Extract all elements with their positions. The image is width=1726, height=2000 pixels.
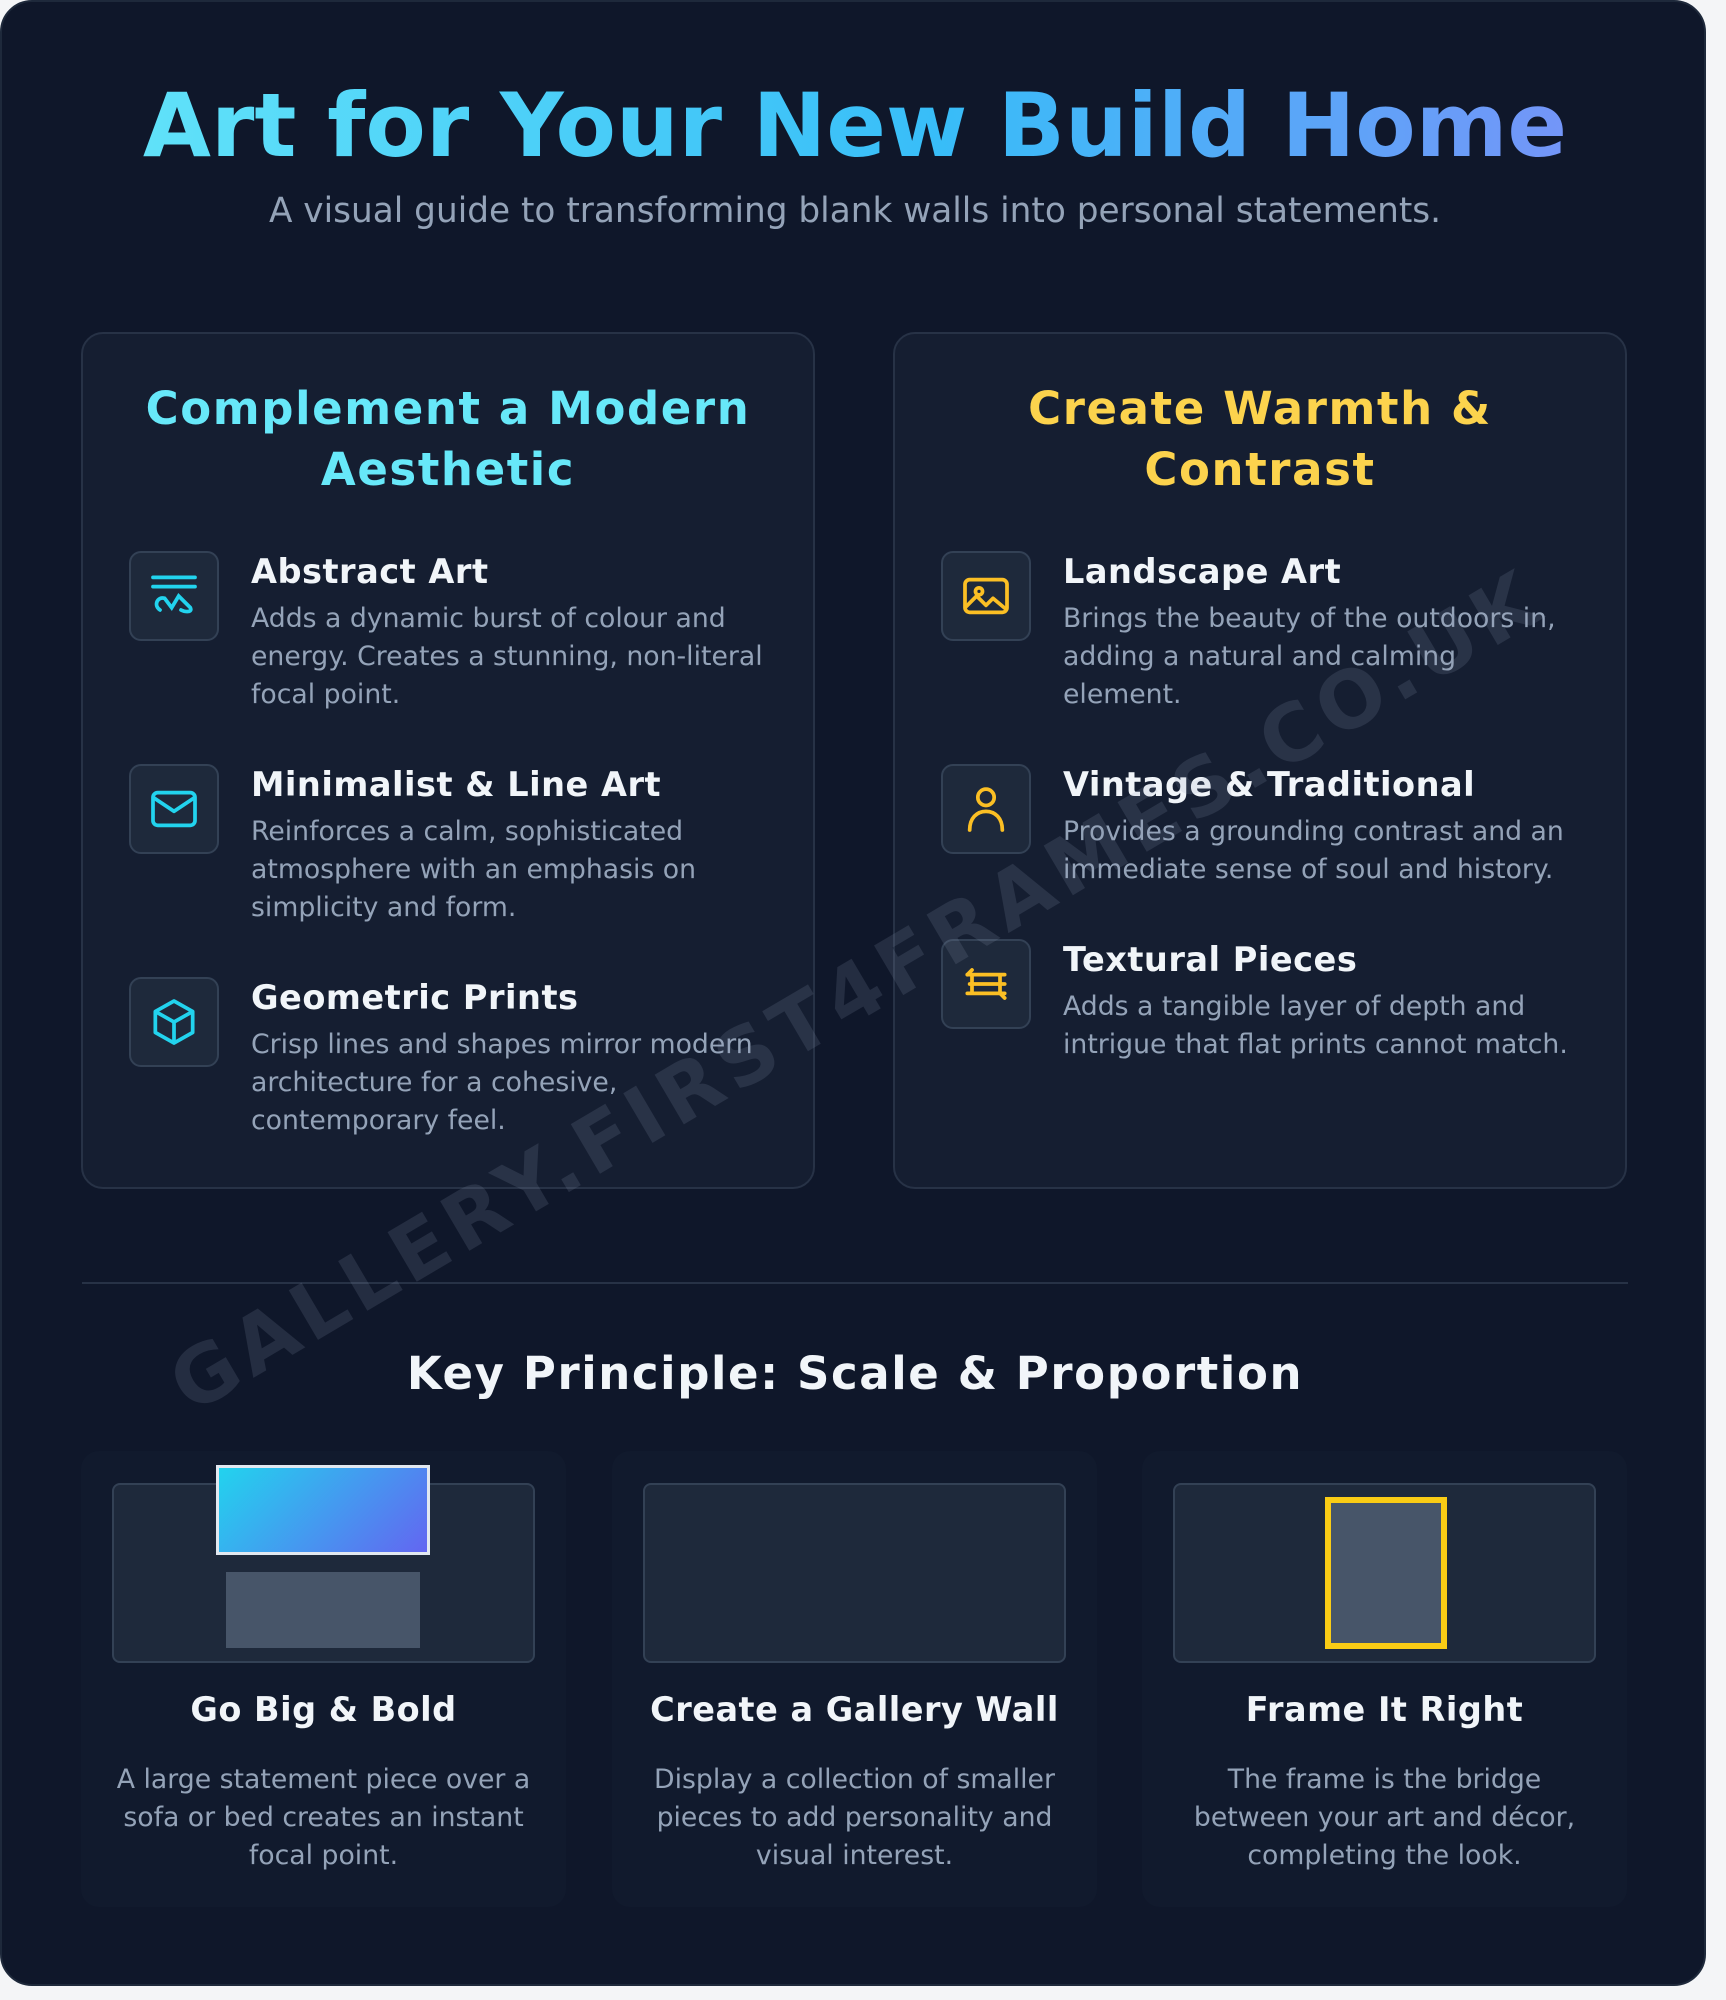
card: frame <box>1142 1451 1627 1907</box>
icon: person <box>941 764 1031 854</box>
item: vintage <box>941 764 1564 885</box>
panel: warmth: Adds a tangible layer of depth and intrigue that flat prints cannot match. <box>1063 991 1568 1060</box>
panel: warmth: Landscape Art <box>1063 552 1341 591</box>
heading: warmth: Contrast <box>1144 443 1376 496</box>
panel: warmth: Vintage & Traditional <box>1063 765 1475 804</box>
icon: cube <box>129 977 219 1067</box>
item: textural <box>941 939 1568 1060</box>
item: abstract art <box>129 551 763 710</box>
panel: modern aesthetic: Crisp lines and shapes mirror modern architecture for a cohesive, contemporary feel. <box>251 1029 753 1136</box>
heading: warmth: Create Warmth & <box>1028 382 1492 435</box>
panel: modern aesthetic <box>81 332 815 1189</box>
icon: picture <box>941 551 1031 641</box>
title: gallery wall: Create a Gallery Wall <box>650 1690 1059 1729</box>
panel: warmth: Brings the beauty of the outdoors in, adding a natural and calming element. <box>1063 603 1556 710</box>
title: Art for Your New Build Home <box>143 74 1567 177</box>
preview: gallery wall <box>643 1483 1066 1663</box>
panel: warmth: Provides a grounding contrast and an immediate sense of soul and history. <box>1063 816 1564 885</box>
heading: modern <box>146 382 750 496</box>
item: geometric <box>129 977 753 1136</box>
item: minimalist <box>129 764 696 923</box>
icon: envelope <box>129 764 219 854</box>
text: gallery wall: Display a collection of smaller pieces to add personality and visual interest. <box>654 1764 1055 1871</box>
card: go big <box>81 1451 566 1907</box>
heading: key principle: Key Principle: Scale & Proportion <box>407 1347 1303 1400</box>
heading: modern: Aesthetic <box>321 443 575 496</box>
panel: modern aesthetic: Adds a dynamic burst of colour and energy. Creates a stunning, non-literal focal point. <box>251 603 763 710</box>
heading: warmth <box>1028 382 1492 496</box>
subtitle: A visual guide to transforming blank walls into personal statements. <box>269 191 1441 231</box>
text: frame: The frame is the bridge between your art and décor, completing the look. <box>1194 1764 1575 1871</box>
panel: warmth: Textural Pieces <box>1063 940 1357 979</box>
panel: modern aesthetic: Reinforces a calm, sophisticated atmosphere with an emphasis on simplicity and form. <box>251 816 696 923</box>
panel: modern aesthetic: Abstract Art <box>251 552 489 591</box>
preview: big art over sofa <box>112 1483 535 1663</box>
title: go big: Go Big & Bold <box>190 1690 457 1729</box>
title: frame: Frame It Right <box>1246 1690 1523 1729</box>
preview: frame <box>1173 1483 1596 1663</box>
heading: modern: Complement a Modern <box>146 382 750 435</box>
panel: modern aesthetic: Minimalist & Line Art <box>251 765 661 804</box>
text: go big: A large statement piece over a sofa or bed creates an instant focal point. <box>117 1764 530 1871</box>
panel: warmth <box>893 332 1627 1189</box>
icon: texture <box>941 939 1031 1029</box>
panel: modern aesthetic: Geometric Prints <box>251 978 579 1017</box>
icon: abstract <box>129 551 219 641</box>
card: gallery wall <box>612 1451 1097 1907</box>
item: landscape <box>941 551 1556 710</box>
watermark: GALLERY.FIRST4FRAMES.CO.UK <box>154 551 1560 1431</box>
